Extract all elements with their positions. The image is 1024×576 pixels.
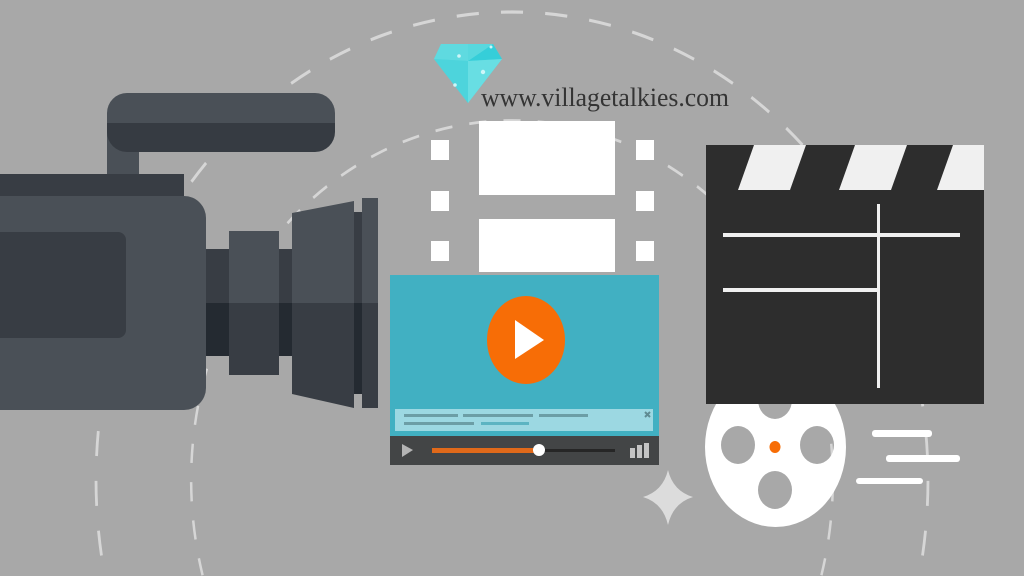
lens neck [354, 212, 362, 394]
icon: sparkle star [643, 470, 693, 525]
icon: clapperboard [706, 145, 984, 404]
progress handle [533, 444, 545, 456]
camera handle post [107, 125, 139, 177]
film frame bottom [479, 219, 615, 272]
icon: film reel [705, 367, 846, 527]
camera body [0, 196, 206, 410]
lens ring [229, 231, 279, 375]
caption box [395, 409, 653, 431]
website address: www.villagetalkies.com [481, 83, 729, 112]
lens hood [292, 201, 354, 408]
icon: video camera [0, 93, 378, 410]
small play icon [402, 444, 413, 457]
progress fill [432, 448, 539, 453]
camera top plate [0, 174, 184, 196]
control bar [390, 436, 659, 465]
progress track [432, 449, 615, 452]
icon: orange play button [487, 296, 565, 384]
icon: film strip [431, 121, 654, 272]
film sprockets [431, 140, 654, 261]
icon: speed lines [856, 430, 960, 484]
player screen [390, 275, 659, 436]
clapper body [706, 145, 984, 404]
lens flange [362, 198, 378, 408]
volume bars [630, 443, 649, 458]
panel: video player [390, 275, 659, 465]
lens connectors [206, 249, 292, 356]
film frame top [479, 121, 615, 195]
camera handle [107, 93, 335, 152]
clapper stripes [738, 145, 984, 190]
camera side panel [0, 232, 126, 338]
icon: diamond [434, 44, 502, 103]
clapper lines [723, 204, 960, 388]
